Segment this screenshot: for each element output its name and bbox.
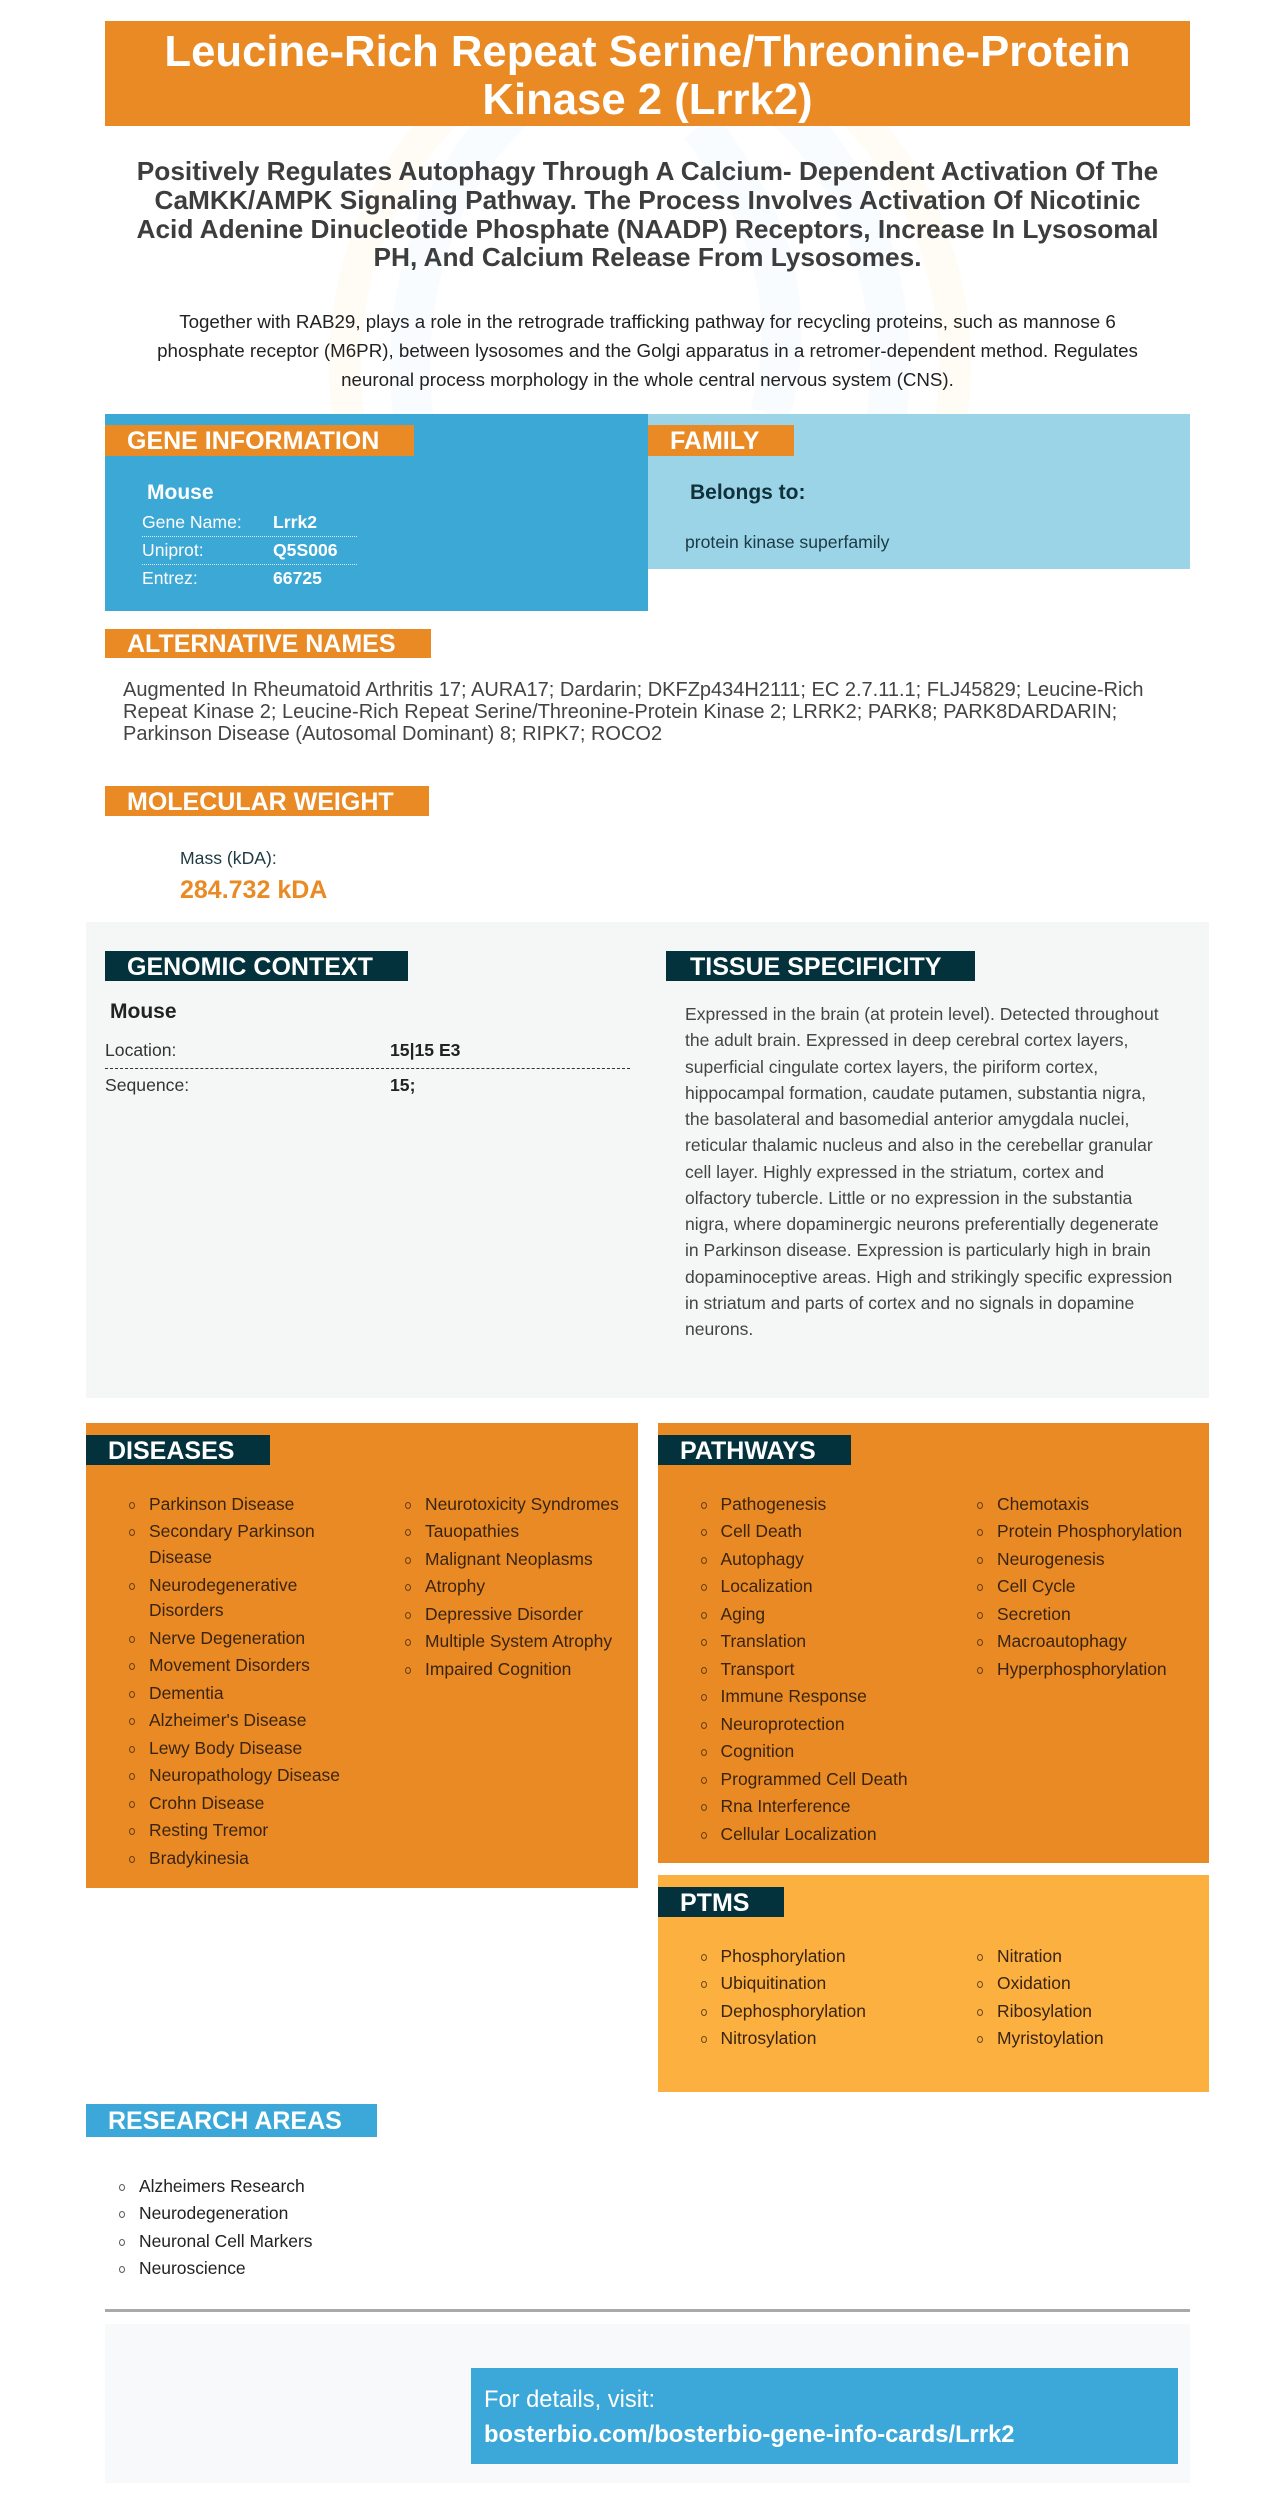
tissue specificity text: in Parkinson disease. Expression is particularly high in brain (685, 1240, 1151, 1260)
list: diseases column 1: Alzheimer's Disease (149, 1710, 306, 1730)
list: pathways column 2 (977, 1494, 1182, 1679)
tissue specificity text: neurons. (685, 1319, 753, 1339)
list: diseases column 1: Movement Disorders (149, 1655, 310, 1675)
list: ptms column 1 (701, 1946, 866, 2048)
list: diseases column 1: Parkinson Disease (149, 1494, 294, 1514)
list: pathways column 1: Autophagy (720, 1549, 804, 1569)
list: pathways column 2: Secretion (997, 1604, 1071, 1624)
mass label: Mass (kDA): (180, 848, 277, 868)
title banner: Kinase 2 (Lrrk2) (482, 74, 813, 124)
list: research areas: Neuroscience (139, 2258, 246, 2278)
list: research areas (119, 2176, 312, 2278)
heading: diseases: DISEASES (108, 1437, 234, 1465)
intro paragraph: phosphate receptor (M6PR), between lysosomes and the Golgi apparatus in a retromer-dependent method. Regulates (157, 340, 1138, 361)
list: research areas: Neurodegeneration (139, 2203, 288, 2223)
list: ptms column 1: Phosphorylation (720, 1946, 846, 1966)
list: pathways column 1: Cognition (720, 1741, 794, 1761)
heading: ptms (658, 1887, 784, 1917)
heading: tissue specificity: TISSUE SPECIFICITY (690, 953, 941, 981)
list: pathways column 1: Translation (720, 1631, 806, 1651)
call to action url: bosterbio.com/bosterbio-gene-info-cards/Lrrk2 (484, 2421, 1014, 2448)
tissue specificity text: dopaminoceptive areas. High and strikingly specific expression (685, 1266, 1172, 1286)
tissue specificity text: hippocampal formation, caudate putamen, substantia nigra, (685, 1083, 1146, 1103)
list: diseases column 1: Neuropathology Disease (149, 1765, 340, 1785)
list: diseases column 2: Multiple System Atrophy (425, 1631, 612, 1651)
panel: genomic context and tissue specificity (86, 922, 1209, 1398)
panel: diseases (86, 1423, 638, 1888)
list: pathways column 2: Protein Phosphorylation (997, 1521, 1182, 1541)
subtitle: Positively Regulates Autophagy Through A Calcium- Dependent Activation Of The (137, 156, 1158, 186)
footer panel (105, 2324, 1190, 2483)
list: diseases column 1: Crohn Disease (149, 1793, 264, 1813)
list: pathways column 1: Pathogenesis (720, 1494, 826, 1514)
list: ptms column 2 (977, 1946, 1104, 2048)
list: diseases column 2: Neurotoxicity Syndromes (425, 1494, 619, 1514)
list: ptms column 1: Ubiquitination (720, 1973, 826, 1993)
list: diseases column 2: Impaired Cognition (425, 1659, 571, 1679)
list: diseases column 1: Lewy Body Disease (149, 1738, 302, 1758)
list: diseases column 2: Tauopathies (425, 1521, 519, 1541)
subtitle: PH, And Calcium Release From Lysosomes. (373, 242, 922, 272)
list: diseases column 1: Dementia (149, 1683, 224, 1703)
alternative names text: Parkinson Disease (Autosomal Dominant) 8; RIPK7; ROCO2 (123, 723, 662, 745)
title banner: Leucine-Rich Repeat Serine/Threonine-Protein (164, 27, 1131, 76)
list: diseases column 1: Secondary Parkinson (149, 1521, 315, 1541)
panel: gene information (105, 414, 648, 611)
family value: protein kinase superfamily (685, 532, 889, 552)
list: ptms column 2: Oxidation (997, 1973, 1071, 1993)
list: pathways column 1: Immune Response (720, 1686, 867, 1706)
heading: pathways: PATHWAYS (680, 1437, 816, 1465)
alternative names text (123, 679, 1144, 745)
list: diseases column 1: Disorders (149, 1600, 224, 1620)
heading: research areas (86, 2104, 377, 2137)
list: pathways column 2: Macroautophagy (997, 1631, 1127, 1651)
list: research areas: Neuronal Cell Markers (139, 2231, 312, 2251)
list: pathways column 2: Chemotaxis (997, 1494, 1089, 1514)
heading: family: FAMILY (670, 427, 759, 455)
list: research areas: Alzheimers Research (139, 2176, 305, 2196)
list: diseases column 1: Disease (149, 1547, 212, 1567)
genomic table: Location: (105, 1040, 176, 1060)
heading: pathways (658, 1435, 851, 1465)
tissue specificity text: superficial cingulate cortex layers, the piriform cortex, (685, 1056, 1098, 1076)
tissue specificity text: cell layer. Highly expressed in the striatum, cortex and (685, 1162, 1104, 1182)
list: pathways column 2: Cell Cycle (997, 1576, 1076, 1596)
species: mouse: Mouse (147, 481, 214, 504)
gene info table (142, 512, 357, 588)
gene info table: Uniprot: (142, 540, 204, 560)
gene info table: Entrez: (142, 568, 198, 588)
gene info table: Gene Name: (142, 512, 242, 532)
call to action box (471, 2368, 1178, 2464)
list: diseases column 2: Depressive Disorder (425, 1604, 583, 1624)
subtitle: CaMKK/AMPK Signaling Pathway. The Process Involves Activation Of Nicotinic (154, 185, 1141, 215)
list: ptms column 1: Dephosphorylation (720, 2001, 866, 2021)
tissue specificity text: olfactory tubercle. Little or no expression in the substantia (685, 1188, 1132, 1208)
list: pathways column 2: Neurogenesis (997, 1549, 1105, 1569)
panel: ptms (658, 1875, 1209, 2092)
list: ptms column 2: Nitration (997, 1946, 1062, 1966)
mass value: 284.732 kDA (180, 876, 327, 904)
list: diseases column 1: Resting Tremor (149, 1820, 268, 1840)
call to action label: For details, visit: (484, 2387, 655, 2413)
intro paragraph (157, 311, 1138, 390)
intro paragraph: Together with RAB29, plays a role in the retrograde trafficking pathway for recycling proteins, such as mannose 6 (179, 311, 1116, 332)
subtitle: Acid Adenine Dinucleotide Phosphate (NAADP) Receptors, Increase In Lysosomal (136, 214, 1159, 244)
list: pathways column 1: Localization (720, 1576, 813, 1596)
tissue specificity text (685, 1004, 1172, 1339)
belongs to label: Belongs to: (690, 481, 806, 504)
heading: family (648, 425, 794, 456)
heading: molecular weight: MOLECULAR WEIGHT (127, 788, 394, 816)
genomic table: 15|15 E3 (390, 1040, 460, 1060)
list: pathways column 1: Cellular Localization (720, 1824, 877, 1844)
list: diseases column 1 (129, 1494, 340, 1868)
list: ptms column 2: Myristoylation (997, 2028, 1104, 2048)
tissue specificity text: reticular thalamic nucleus and also in the cerebellar granular (685, 1135, 1153, 1155)
heading: research areas: RESEARCH AREAS (108, 2107, 342, 2135)
list: pathways column 1: Aging (720, 1604, 765, 1624)
panel: pathways (658, 1423, 1209, 1863)
gene info table: Q5S006 (273, 540, 338, 560)
list: diseases column 1: Bradykinesia (149, 1848, 249, 1868)
genomic table: 15; (390, 1075, 415, 1095)
list: pathways column 1 (701, 1494, 908, 1844)
alternative names text: Augmented In Rheumatoid Arthritis 17; AURA17; Dardarin; DKFZp434H2111; EC 2.7.11.1; FLJ45829; Leucine-Rich (123, 679, 1144, 701)
species: mouse: Mouse (110, 1000, 177, 1023)
alternative names text: Repeat Kinase 2; Leucine-Rich Repeat Serine/Threonine-Protein Kinase 2; LRRK2; PARK8; PARK8DARDARIN; (123, 701, 1117, 723)
subtitle (136, 156, 1159, 272)
heading: genomic context: GENOMIC CONTEXT (127, 953, 373, 981)
intro paragraph: neuronal process morphology in the whole central nervous system (CNS). (341, 369, 954, 390)
genomic table: Sequence: (105, 1075, 189, 1095)
genomic table (105, 1040, 630, 1095)
list: ptms column 1: Nitrosylation (720, 2028, 816, 2048)
tissue specificity text: the adult brain. Expressed in deep cerebral cortex layers, (685, 1030, 1128, 1050)
list: diseases column 2: Malignant Neoplasms (425, 1549, 593, 1569)
list: ptms column 2: Ribosylation (997, 2001, 1092, 2021)
tissue specificity text: Expressed in the brain (at protein level). Detected throughout (685, 1004, 1159, 1024)
list: pathways column 1: Cell Death (720, 1521, 802, 1541)
list: diseases column 1: Nerve Degeneration (149, 1628, 305, 1648)
gene info table: 66725 (273, 568, 322, 588)
list: pathways column 1: Programmed Cell Death (720, 1769, 908, 1789)
list: diseases column 2 (405, 1494, 619, 1679)
gene info table: Lrrk2 (273, 512, 317, 532)
list: diseases column 2: Atrophy (425, 1576, 485, 1596)
tissue specificity text: the basolateral and basomedial anterior amygdala nuclei, (685, 1109, 1129, 1129)
list: pathways column 1: Neuroprotection (720, 1714, 845, 1734)
list: pathways column 1: Rna Interference (720, 1796, 850, 1816)
panel: family (648, 414, 1190, 569)
heading: diseases (86, 1435, 270, 1465)
tissue specificity text: nigra, where dopaminergic neurons preferentially degenerate (685, 1214, 1159, 1234)
list: diseases column 1: Neurodegenerative (149, 1575, 297, 1595)
title banner (105, 21, 1190, 126)
list: pathways column 1: Transport (720, 1659, 794, 1679)
background watermark logo (329, 126, 971, 414)
tissue specificity text: in striatum and parts of cortex and no signals in dopamine (685, 1293, 1134, 1313)
heading: ptms: PTMS (680, 1889, 749, 1917)
heading: alternative names: ALTERNATIVE NAMES (127, 630, 396, 658)
list: pathways column 2: Hyperphosphorylation (997, 1659, 1167, 1679)
heading: gene information: GENE INFORMATION (127, 427, 379, 455)
